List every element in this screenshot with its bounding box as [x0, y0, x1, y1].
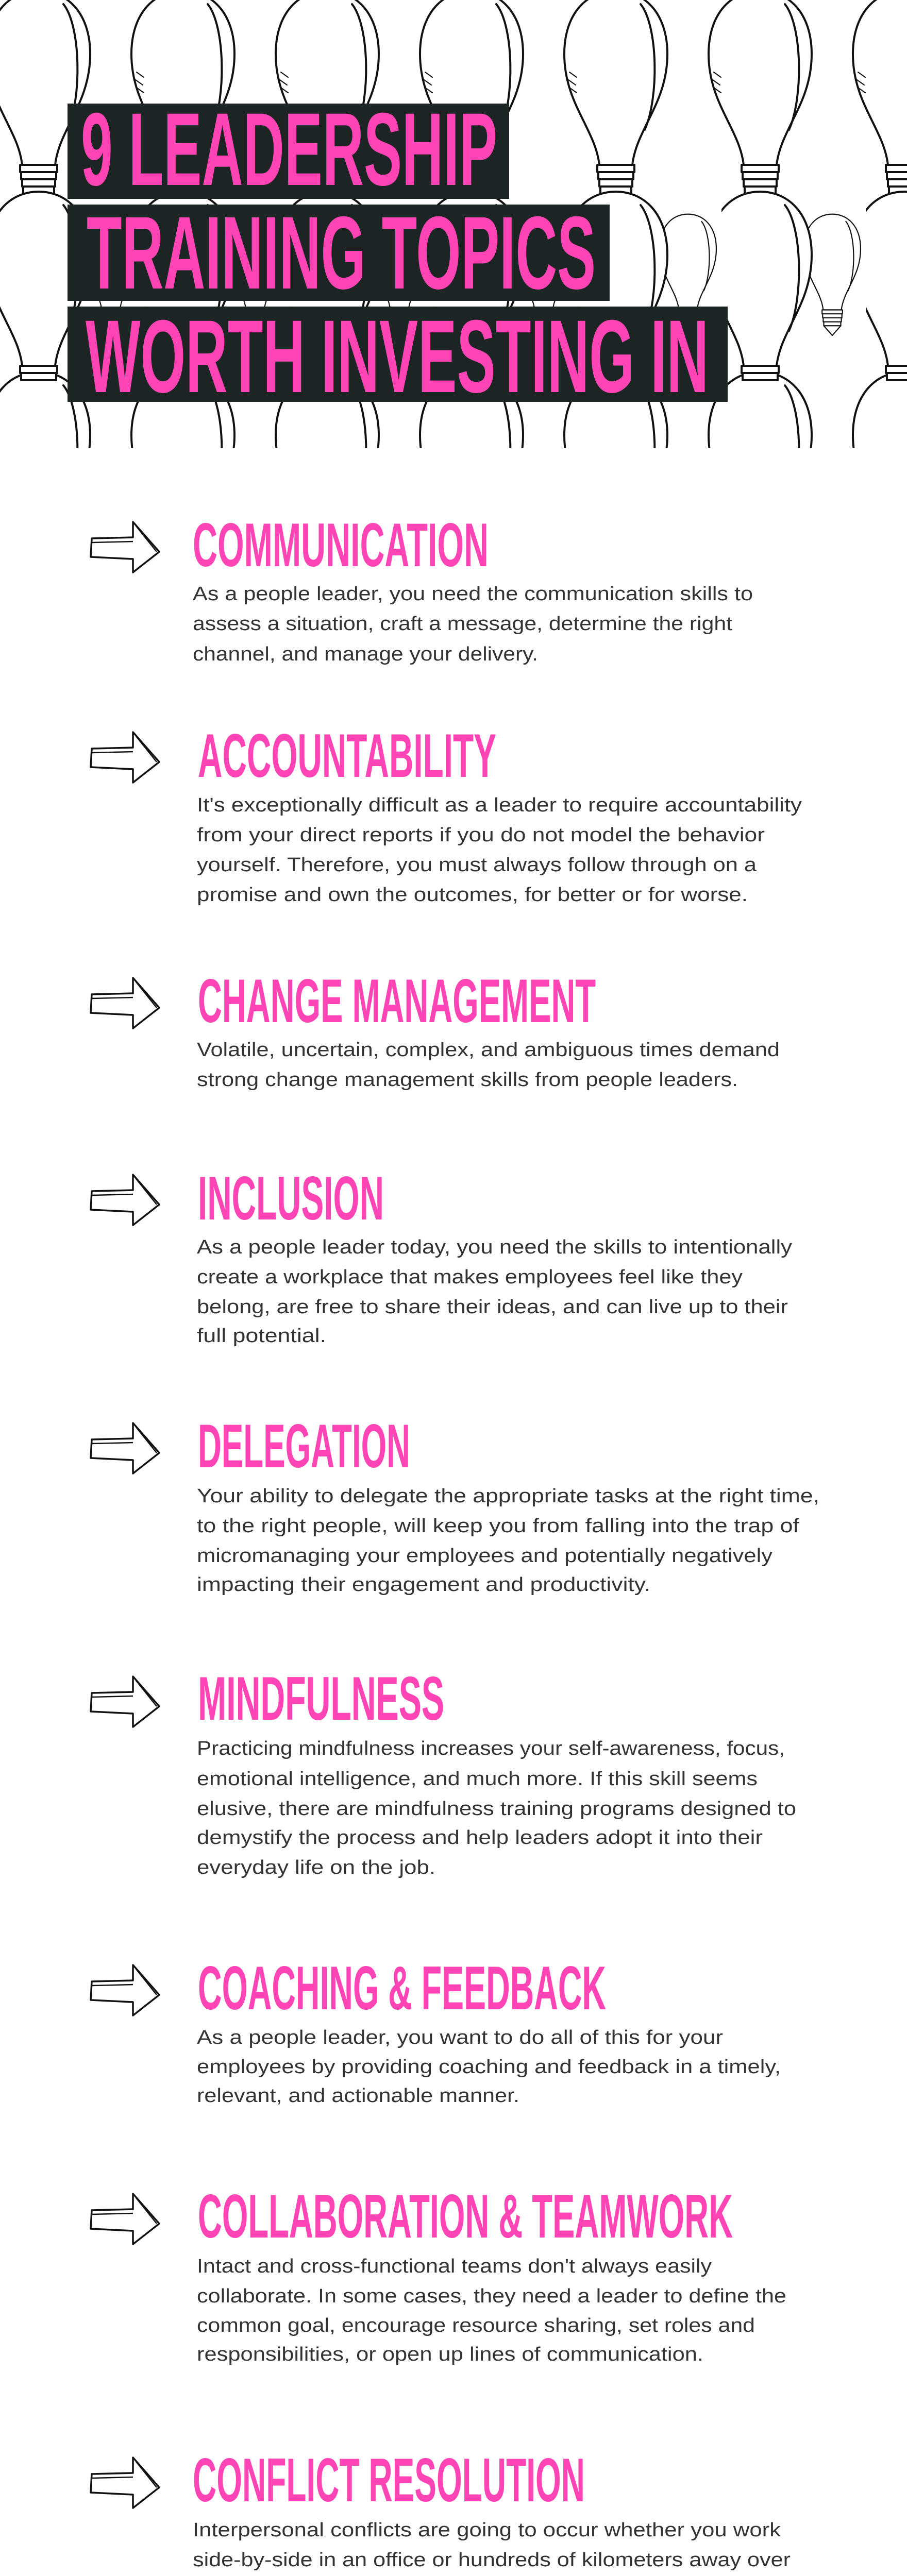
body text	[192, 2519, 791, 2576]
icon: arrow	[91, 1175, 159, 1225]
item 9: conflict resolution	[91, 2446, 791, 2576]
body text: responsibilities, or open up lines of communication.	[197, 2344, 703, 2365]
heading: delegation: DELEGATION	[198, 1412, 410, 1481]
body text: Intact and cross-functional teams don't always easily	[197, 2256, 712, 2277]
body text: As a people leader, you need the communication skills to	[193, 583, 753, 605]
body text: yourself. Therefore, you must always follow through on a	[197, 854, 757, 876]
body text	[197, 794, 802, 906]
body text: As a people leader, you want to do all of this for your	[197, 2027, 723, 2048]
body text: everyday life on the job.	[197, 1857, 435, 1878]
body text: demystify the process and help leaders adopt it into their	[197, 1827, 763, 1849]
icon: arrow	[91, 978, 159, 1028]
title	[68, 91, 728, 414]
body text: create a workplace that makes employees feel like they	[197, 1266, 743, 1288]
body text: As a people leader today, you need the skills to intentionally	[197, 1236, 792, 1258]
item 8: collaboration & teamwork	[91, 2182, 786, 2365]
heading: mindfulness: MINDFULNESS	[198, 1664, 444, 1733]
item 5: delegation	[91, 1412, 819, 1596]
body text: elusive, there are mindfulness training programs designed to	[197, 1798, 796, 1820]
body text	[197, 1485, 819, 1596]
body text	[197, 1039, 780, 1091]
heading: communication: COMMUNICATION	[193, 511, 489, 580]
item 3: change management	[91, 967, 780, 1091]
body text: micromanaging your employees and potentially negatively	[197, 1545, 772, 1567]
icon: arrow	[91, 1965, 159, 2015]
item 1: communication	[91, 511, 753, 665]
body text: strong change management skills from people leaders.	[197, 1069, 738, 1091]
body text: Practicing mindfulness increases your self-awareness, focus,	[197, 1738, 785, 1759]
body text: It's exceptionally difficult as a leader to require accountability	[197, 794, 802, 816]
title: 9 LEADERSHIP	[81, 91, 497, 207]
icon: arrow	[91, 732, 159, 783]
icon: arrow	[91, 522, 159, 572]
body text	[197, 2027, 781, 2107]
item 6: mindfulness	[91, 1664, 796, 1878]
heading: inclusion: INCLUSION	[198, 1164, 384, 1233]
heading: accountability: ACCOUNTABILITY	[198, 721, 496, 790]
header background: light bulb pattern	[0, 0, 907, 448]
item 2: accountability	[91, 721, 802, 906]
heading: conflict resolution: CONFLICT RESOLUTION	[193, 2446, 585, 2515]
body text: from your direct reports if you do not model the behavior	[197, 824, 765, 846]
item 4: inclusion	[91, 1164, 792, 1347]
body text: Your ability to delegate the appropriate tasks at the right time,	[197, 1485, 819, 1507]
body text: full potential.	[197, 1325, 326, 1347]
body text: collaborate. In some cases, they need a leader to define the	[197, 2285, 786, 2307]
body text: side-by-side in an office or hundreds of kilometers away over	[193, 2549, 791, 2571]
body text: Interpersonal conflicts are going to occur whether you work	[193, 2519, 781, 2541]
icon: arrow	[91, 1423, 159, 1473]
body text: to the right people, will keep you from falling into the trap of	[197, 1515, 800, 1537]
body text: employees by providing coaching and feedback in a timely,	[197, 2056, 781, 2078]
body text	[197, 1236, 792, 1347]
icon: arrow	[91, 1676, 159, 1727]
icon: arrow	[91, 2458, 159, 2508]
body text	[197, 2256, 786, 2365]
body text: assess a situation, craft a message, determine the right	[193, 613, 732, 635]
body text	[193, 583, 753, 665]
item 7: coaching & feedback	[91, 1954, 781, 2107]
body text: belong, are free to share their ideas, and can live up to their	[197, 1296, 788, 1318]
body text	[197, 1738, 796, 1878]
body text: common goal, encourage resource sharing, set roles and	[197, 2315, 755, 2336]
body text: emotional intelligence, and much more. If this skill seems	[197, 1768, 758, 1790]
body text: impacting their engagement and productivity.	[197, 1574, 650, 1596]
body text: promise and own the outcomes, for better or for worse.	[197, 884, 748, 906]
body text: channel, and manage your delivery.	[193, 643, 538, 665]
body text: Volatile, uncertain, complex, and ambiguous times demand	[197, 1039, 780, 1061]
icon: arrow	[91, 2194, 159, 2244]
body text: relevant, and actionable manner.	[197, 2085, 519, 2107]
